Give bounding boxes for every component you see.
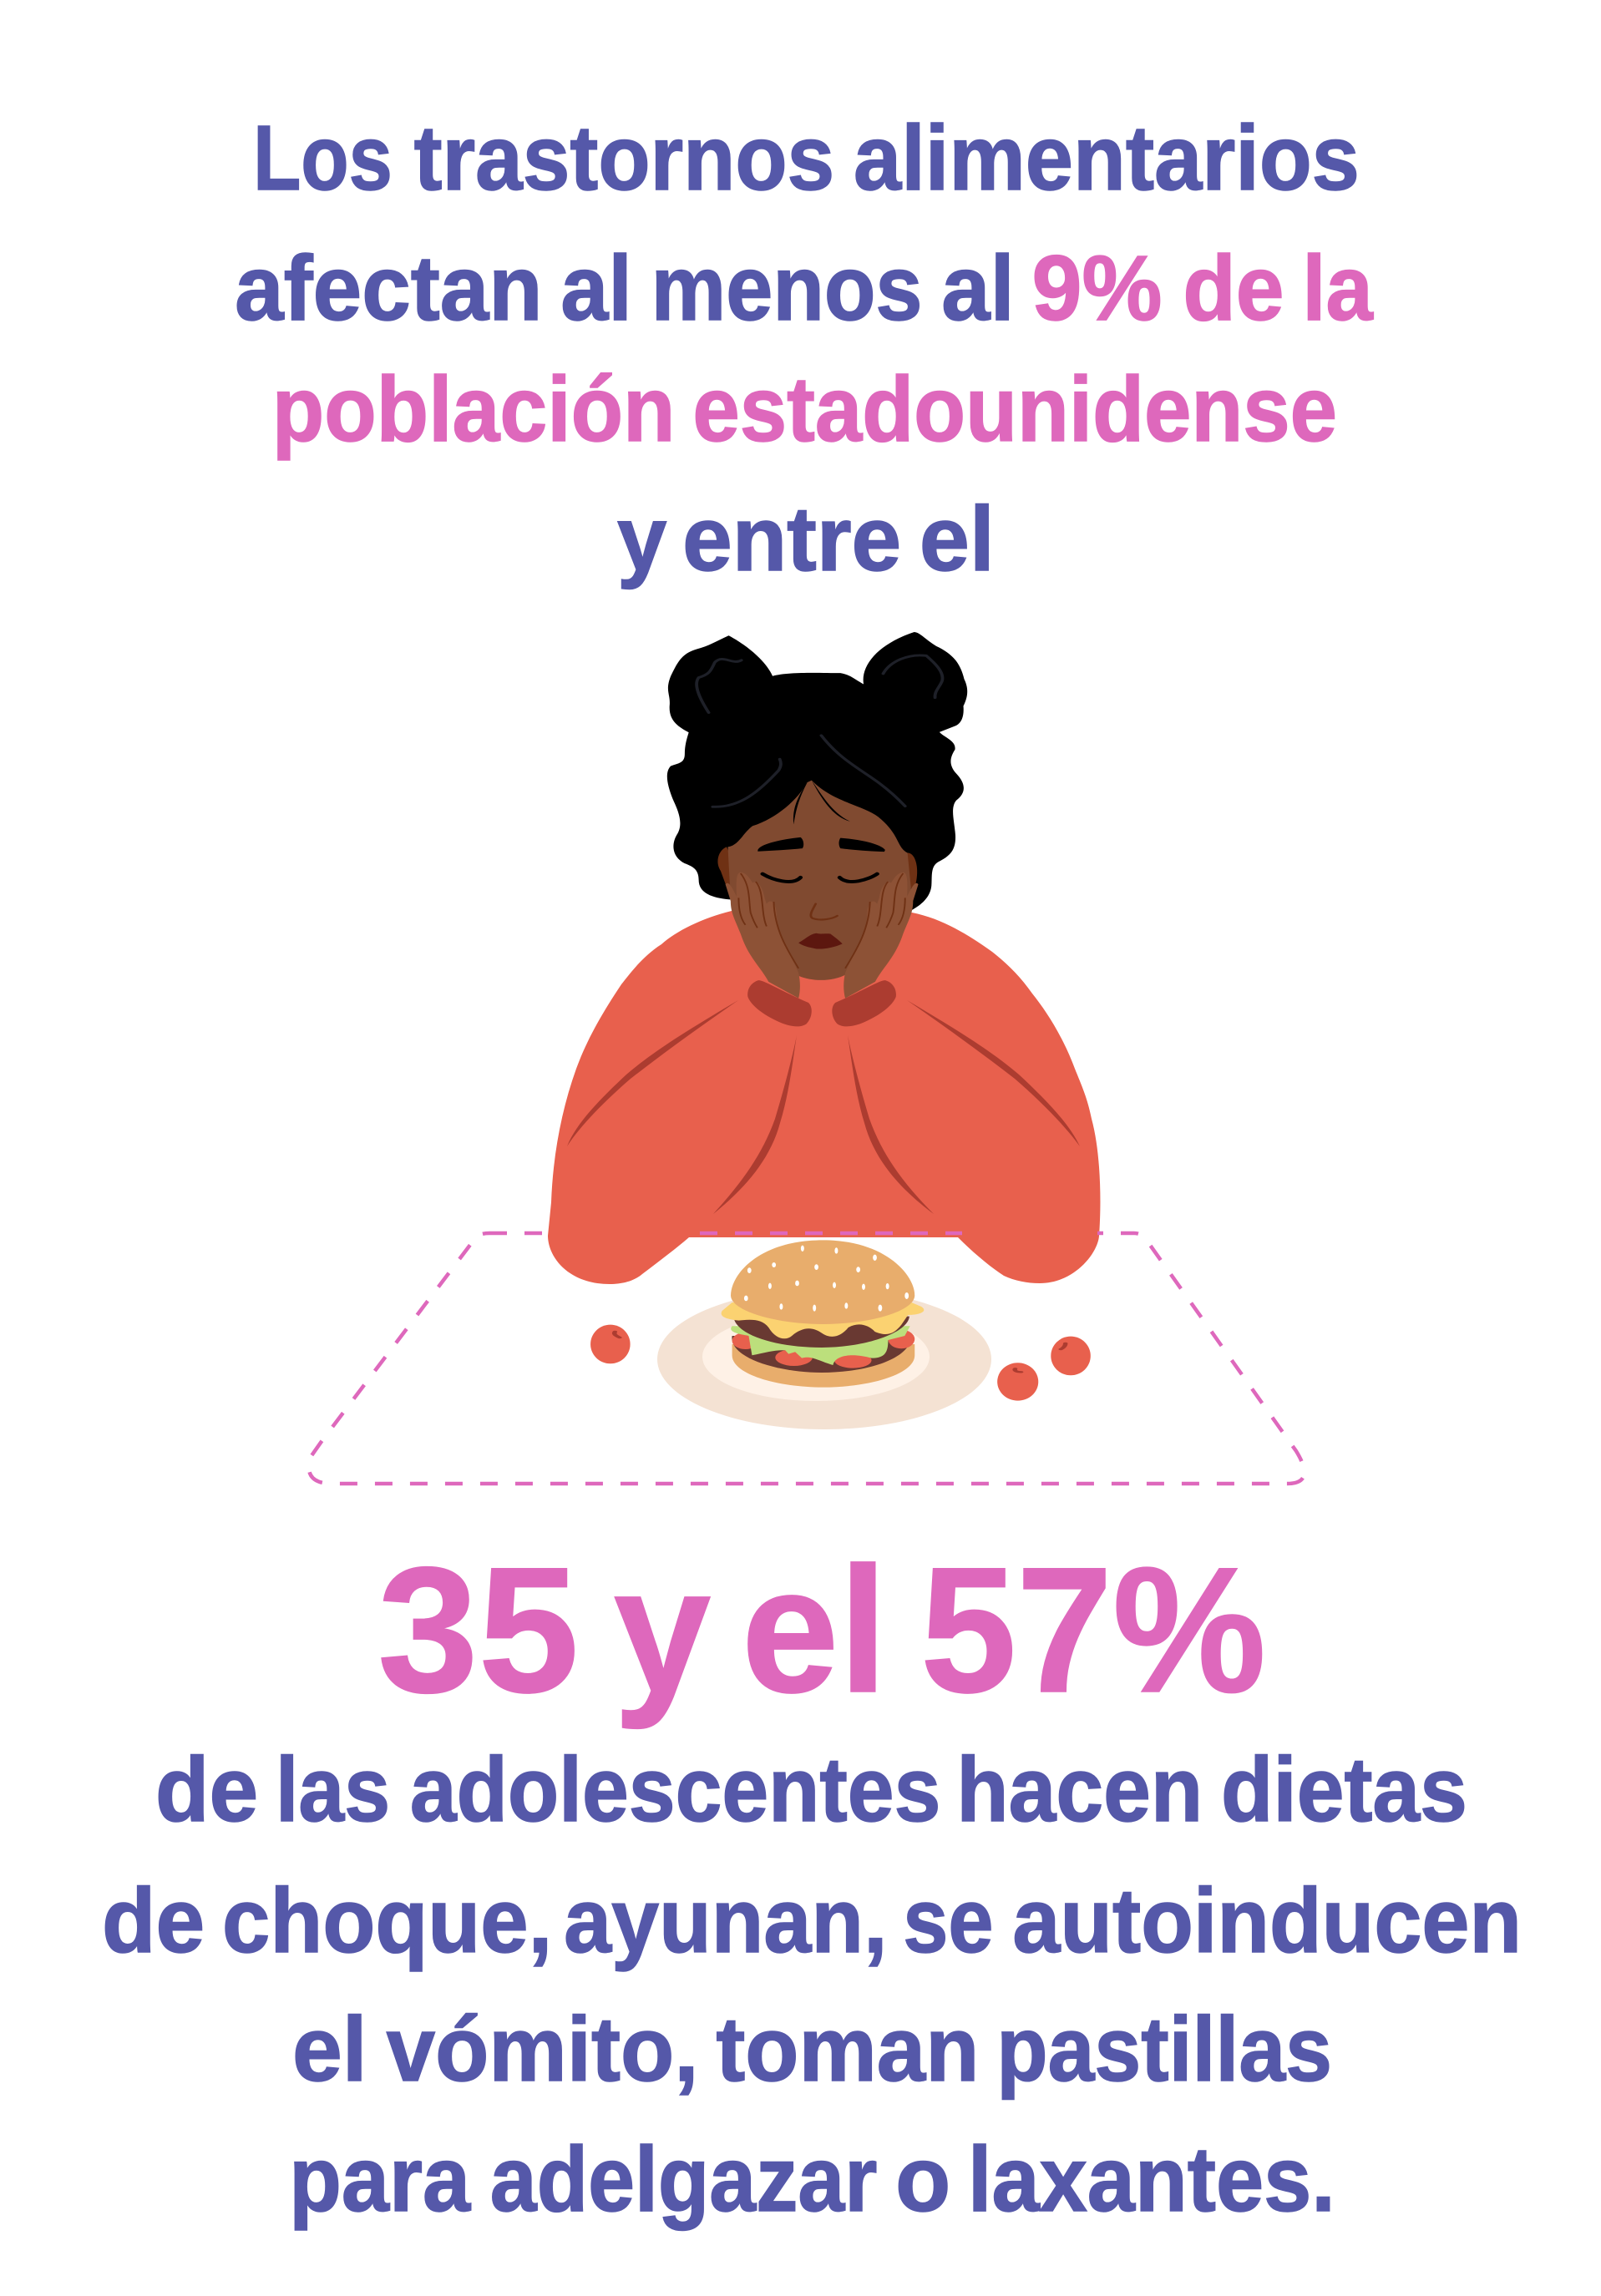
heading line 1 [253,108,1360,210]
heading line 2: pink highlight [1032,238,1374,340]
panel: sweater body [548,911,1100,1284]
closed eyes [763,874,877,882]
heading line 2: pink highlight: de [1183,238,1284,340]
heading line 2: blue part [235,238,1015,340]
big statistic: 35 [377,1530,579,1730]
heading line 1: trastornos [414,108,834,210]
body line 4: laxantes. [968,2128,1335,2231]
body line 2 [102,1870,1522,1972]
sleeve cuffs [747,980,896,1026]
body line 1: las [276,1739,390,1841]
illustration: girl and table [309,632,1305,1484]
body line 1: dietas [1221,1739,1467,1841]
ears [717,847,917,898]
body line 4 [289,2128,1335,2231]
body line 2: autoinducen [1012,1870,1522,1972]
body line 2: se [903,1870,994,1972]
sweater folds [567,1000,1080,1214]
icon: tomatoes [590,1325,1091,1401]
heading line 2: blue part: afectan [235,238,543,340]
heading line 3: pink highlight: población [272,359,675,461]
body line 2: choque, [222,1870,552,1972]
body text [102,1739,1522,2231]
heading line 2: pink highlight: la [1302,238,1374,340]
body line 1: hacen [956,1739,1203,1841]
body line 4: para [289,2128,471,2231]
body line 3: pastillas [996,1999,1332,2101]
heading line 2: blue part: menos [651,238,922,340]
intro heading [235,108,1374,590]
body line 3 [292,1999,1332,2101]
body line 1: de [155,1739,258,1841]
body line 1 [155,1739,1467,1841]
plate [657,1289,991,1429]
sleeve overlays [551,1227,1097,1239]
body line 3: el [292,1999,367,2101]
left hand [726,872,800,999]
heading line 2: pink highlight: 9% [1032,238,1163,340]
mouth [798,933,843,949]
heading line 4: entre [682,488,901,590]
heading line 4 [617,488,995,590]
body line 3: vómito, [387,1999,698,2101]
heading line 3: pink highlight [272,359,1337,461]
big statistic: y [614,1530,711,1730]
dashed table outline [309,1233,1305,1484]
body line 1: adolescentes [410,1739,940,1841]
eyebrows [757,837,885,852]
heading line 3: pink highlight: estadounidense [692,359,1337,461]
hair strands on forehead [793,781,850,824]
body line 3: toman [716,1999,979,2101]
face skin [728,781,912,980]
body line 2: de [102,1870,205,1972]
big statistic: 57% [920,1530,1266,1730]
heading line 1: Los [253,108,393,210]
body line 2: ayunan, [564,1870,887,1972]
heading line 4: el [920,488,995,590]
body line 4: o [895,2128,950,2231]
heading line 4: y [617,488,666,590]
body line 4: adelgazar [490,2128,877,2231]
heading line 2: blue part: al [941,238,1015,340]
big statistic [377,1530,1266,1730]
big statistic: el [742,1530,888,1730]
right hand [844,872,919,999]
heading line 2: blue part: al [560,238,632,340]
icon: hair [667,632,967,910]
heading line 1: alimentarios [854,108,1360,210]
nose [811,904,837,919]
icon: hamburger [722,1240,924,1388]
icon: sad face [717,781,919,1026]
